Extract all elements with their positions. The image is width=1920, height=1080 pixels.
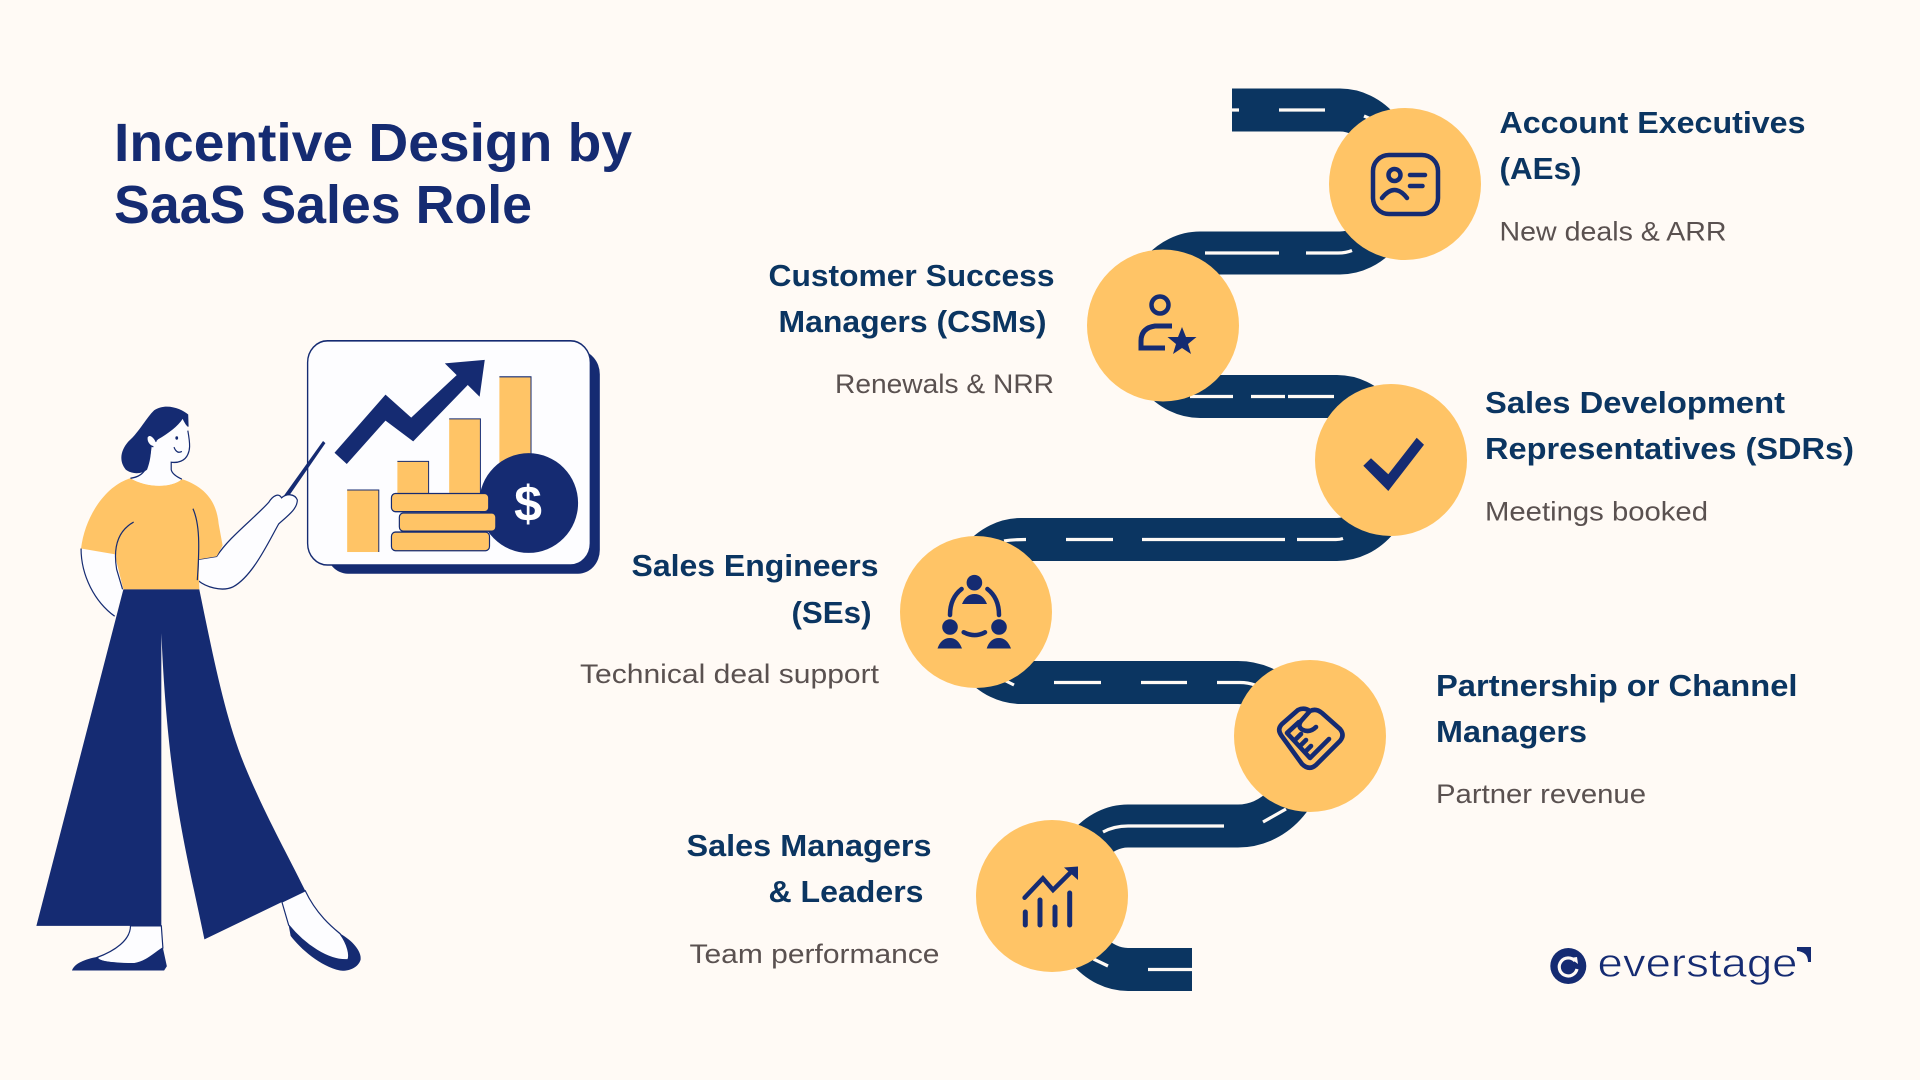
step 4 circle and icon: Sales Engineers bbox=[900, 536, 1052, 688]
label: Partnership or Channel Managers bbox=[1436, 668, 1798, 809]
label: Customer Success Managers: Customer Success bbox=[768, 258, 1054, 293]
label: Sales Engineers: Technical deal support bbox=[580, 659, 880, 689]
label: Partnership or Channel Managers: Partnership or Channel bbox=[1436, 668, 1798, 703]
label: Sales Managers and Leaders: & Leaders bbox=[768, 874, 924, 909]
label: Account Executives: (AEs) bbox=[1500, 151, 1582, 186]
title: Incentive Design by bbox=[114, 113, 632, 173]
chart board bbox=[308, 341, 600, 574]
label: Customer Success Managers: Managers (CSMs) bbox=[778, 304, 1046, 339]
label: Customer Success Managers bbox=[768, 258, 1054, 399]
label: Sales Engineers: Sales Engineers bbox=[632, 548, 878, 583]
label: Sales Development Representatives: Sales Development bbox=[1485, 385, 1785, 420]
label: Sales Managers and Leaders bbox=[686, 828, 940, 969]
label: Partnership or Channel Managers: Partner revenue bbox=[1436, 779, 1646, 809]
title bbox=[114, 113, 632, 235]
label: Customer Success Managers: Renewals & NRR bbox=[835, 369, 1054, 399]
label: Sales Engineers: (SEs) bbox=[792, 595, 872, 630]
label: Sales Managers and Leaders: Sales Managers bbox=[686, 828, 932, 863]
illustration: woman presenting growth chart bbox=[36, 341, 600, 971]
step 5 circle and icon: Partnership or Channel Managers bbox=[1234, 660, 1386, 812]
woman figure bbox=[36, 407, 361, 971]
title: SaaS Sales Role bbox=[114, 175, 532, 235]
label: Sales Engineers bbox=[580, 548, 880, 689]
step 6 circle and icon: Sales Managers and Leaders bbox=[976, 820, 1128, 972]
label: Sales Managers and Leaders: Team performance bbox=[690, 939, 940, 969]
winding road bbox=[963, 110, 1398, 970]
label: Account Executives: New deals & ARR bbox=[1500, 216, 1726, 246]
label: Sales Development Representatives: Representatives (SDRs) bbox=[1485, 431, 1854, 466]
label: Sales Development Representatives bbox=[1485, 385, 1854, 526]
pointer stick bbox=[280, 441, 325, 501]
step 1 circle and icon: Account Executives bbox=[1329, 108, 1481, 260]
dollar sign on coin: $ bbox=[514, 476, 542, 532]
label: Account Executives: Account Executives bbox=[1500, 105, 1806, 140]
label: Sales Development Representatives: Meetings booked bbox=[1485, 496, 1708, 526]
label: Account Executives bbox=[1500, 105, 1806, 246]
everstage logo bbox=[1550, 942, 1811, 986]
step 2 circle and icon: Customer Success Managers bbox=[1087, 250, 1239, 402]
everstage logo: everstage bbox=[1598, 942, 1798, 986]
step 3 circle and icon: Sales Development Representatives bbox=[1315, 384, 1467, 536]
label: Partnership or Channel Managers: Managers bbox=[1436, 714, 1587, 749]
